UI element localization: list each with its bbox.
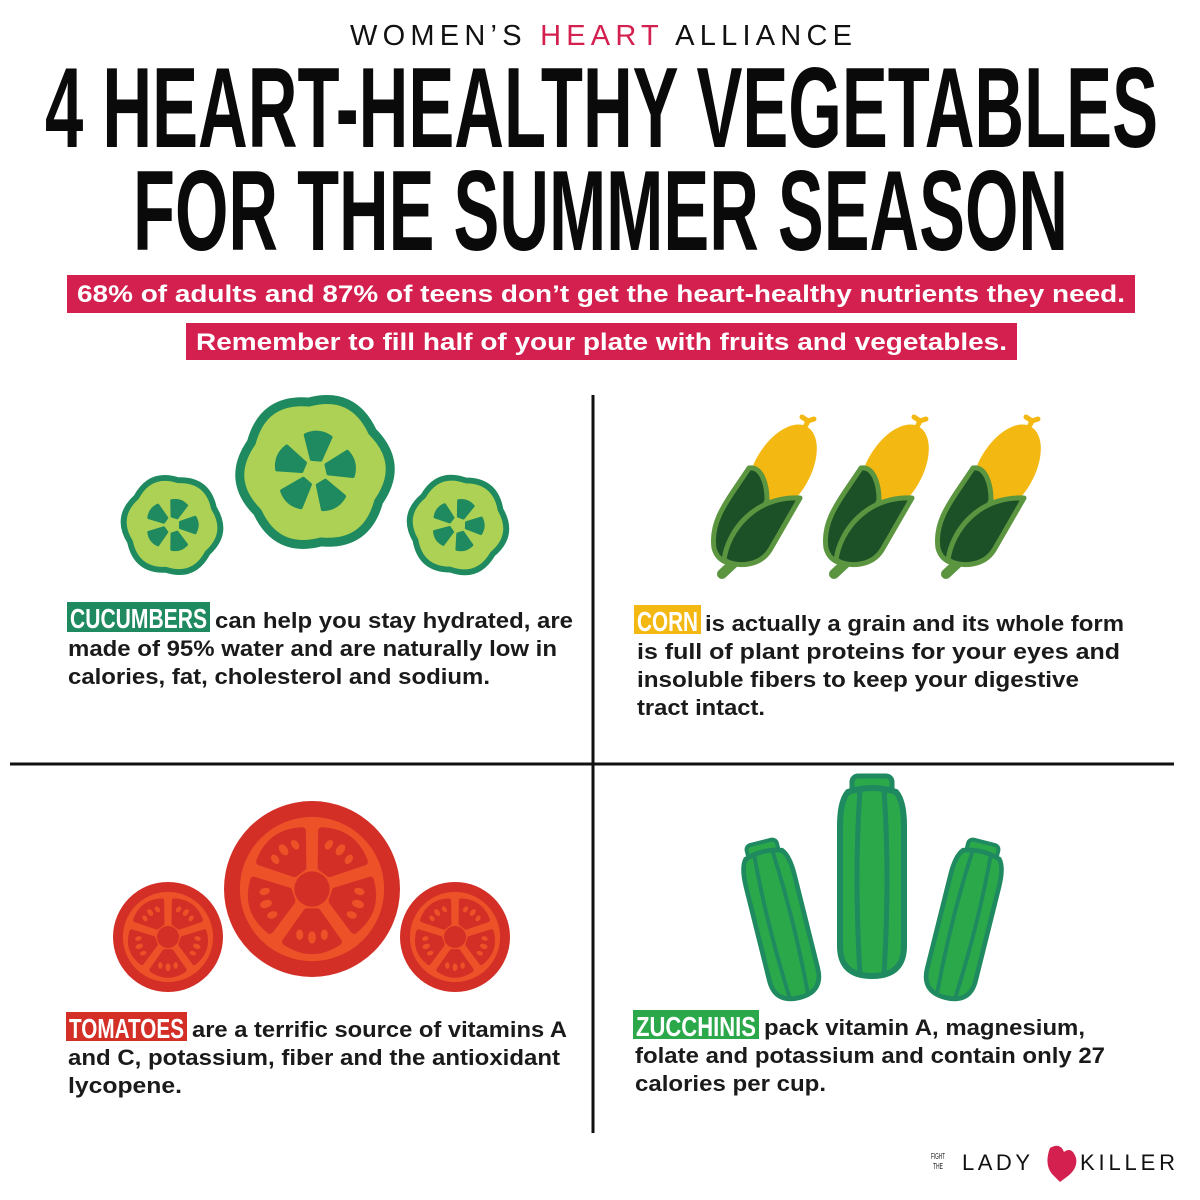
text: tomatoes: lycopene. bbox=[68, 1073, 182, 1098]
banner: statistic: 68% of adults and 87% of teens don’t get the heart-healthy nutrients they need. bbox=[77, 281, 1125, 308]
text: corn: CORN bbox=[637, 606, 698, 637]
logo: fight the lady killer: KILLER bbox=[1080, 1150, 1175, 1175]
logo: fight the lady killer: FIGHT bbox=[931, 1152, 945, 1161]
text: zucchinis bbox=[633, 1010, 1105, 1096]
text: cucumbers bbox=[67, 602, 573, 689]
text: cucumbers: can help you stay hydrated, are bbox=[215, 608, 573, 633]
logo: fight the lady killer: LADY bbox=[962, 1150, 1030, 1175]
banner: reminder bbox=[186, 323, 1017, 360]
banner: reminder: Remember to fill half of your plate with fruits and vegetables. bbox=[196, 329, 1007, 356]
text: cucumbers: calories, fat, cholesterol and sodium. bbox=[68, 664, 490, 689]
logo: fight the lady killer bbox=[931, 1146, 1175, 1182]
text: corn: insoluble fibers to keep your digestive bbox=[637, 667, 1079, 692]
text: cucumbers: made of 95% water and are naturally low in bbox=[68, 636, 557, 661]
text: tomatoes: and C, potassium, fiber and the antioxidant bbox=[68, 1045, 561, 1070]
text: zucchinis: ZUCCHINIS bbox=[636, 1011, 756, 1042]
text: tomatoes: TOMATOES bbox=[69, 1013, 184, 1044]
text: corn: is full of plant proteins for your eyes and bbox=[637, 639, 1120, 664]
icon: corn cobs bbox=[713, 413, 1055, 574]
icon: cucumber slices bbox=[117, 394, 514, 579]
panel: tomatoes bbox=[66, 801, 567, 1098]
header: Women's Heart Alliance: WOMEN’S HEART ALLIANCE bbox=[350, 20, 852, 52]
text: tomatoes: are a terrific source of vitamins A bbox=[192, 1017, 567, 1042]
panel: zucchinis bbox=[633, 776, 1105, 1096]
text: cucumbers: CUCUMBERS bbox=[70, 603, 207, 634]
text: corn: tract intact. bbox=[637, 695, 765, 720]
text: zucchinis: folate and potassium and contain only 27 bbox=[635, 1043, 1105, 1068]
panel: corn bbox=[634, 413, 1124, 720]
text: zucchinis: calories per cup. bbox=[635, 1071, 826, 1096]
panel: cucumbers bbox=[67, 394, 573, 689]
text: zucchinis: pack vitamin A, magnesium, bbox=[764, 1015, 1085, 1040]
icon: tomato slices bbox=[113, 801, 510, 992]
text: tomatoes bbox=[66, 1012, 567, 1098]
banner: statistic bbox=[67, 275, 1135, 313]
title bbox=[45, 45, 1158, 275]
text: corn bbox=[634, 605, 1124, 720]
logo: fight the lady killer: THE bbox=[933, 1162, 943, 1171]
icon: zucchinis bbox=[736, 776, 1009, 1004]
text: corn: is actually a grain and its whole form bbox=[705, 611, 1124, 636]
